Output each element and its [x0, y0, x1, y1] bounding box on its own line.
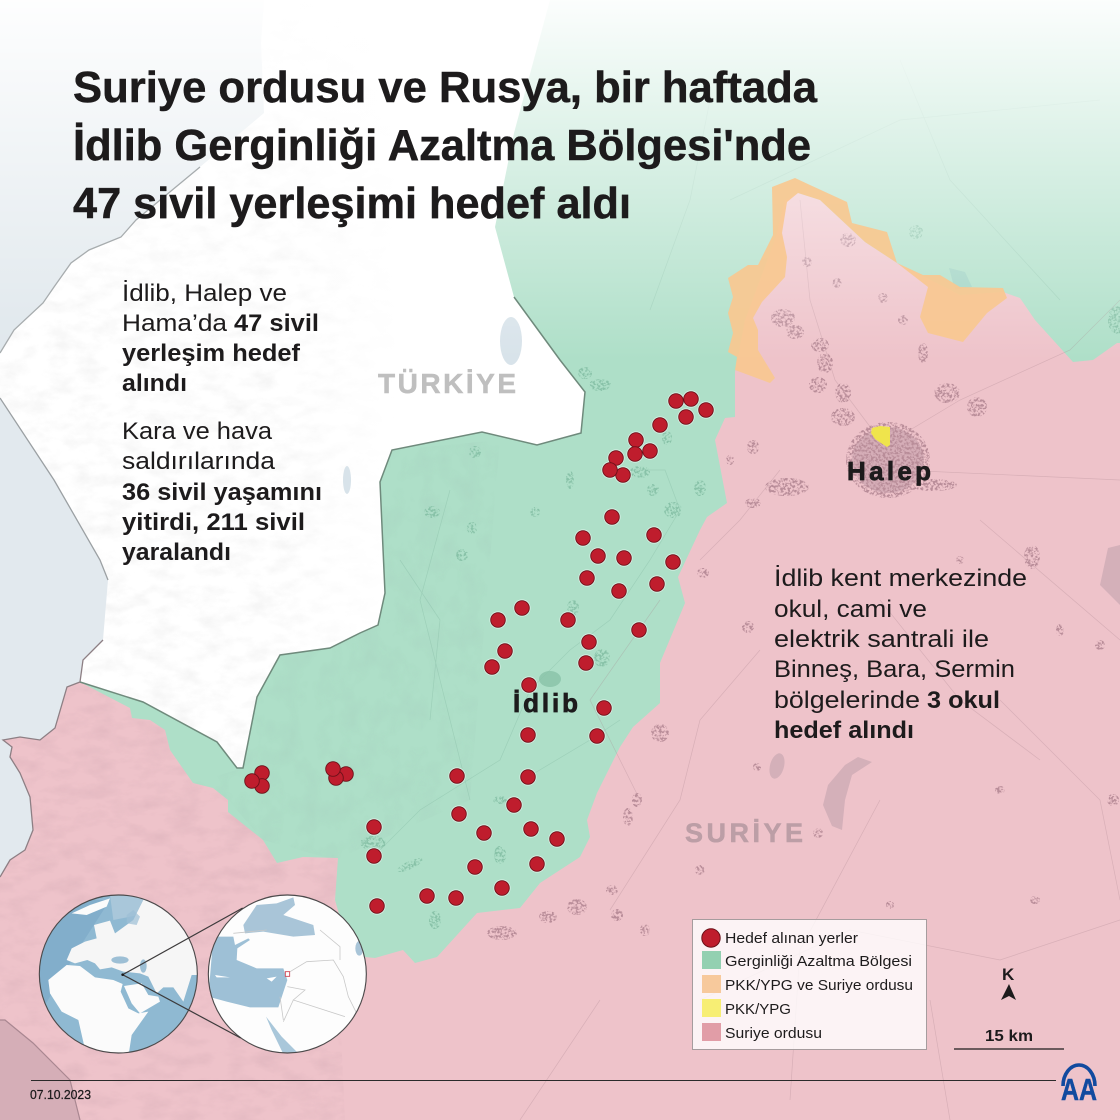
text block: 36 sivil yaşamını yitirdi: Kara ve hava — [122, 418, 273, 445]
region: PKK/YPG ve Suriye ordusu — [728, 178, 1007, 383]
legend item: Hedef alınan yerler: Hedef alınan yerler — [725, 930, 858, 947]
logo: AA: AA — [1061, 1072, 1097, 1107]
legend item: PKK/YPG ve Suriye ordusu: PKK/YPG ve Suriye ordusu — [725, 977, 913, 994]
connector lines — [123, 908, 243, 1038]
scale bar — [954, 1028, 1064, 1049]
map label: Halep: Halep — [847, 456, 931, 486]
north arrow: K — [1002, 965, 1015, 984]
text block: İdlib kent merkezi: hedef alındı — [774, 717, 914, 744]
title — [73, 63, 818, 228]
text block: 47 sivil yerleşim: yerleşim hedef — [122, 340, 301, 367]
footer rule — [31, 1080, 1056, 1082]
map label: Türkiye: TÜRKİYE — [378, 368, 516, 399]
overlay fade at top — [0, 0, 1120, 360]
world globe — [39, 895, 203, 1057]
text block: İdlib kent merkezi — [774, 565, 1027, 744]
text block: 36 sivil yaşamını yitirdi: yaralandı — [122, 539, 231, 566]
text block: 47 sivil yerleşim: Hama’da — [122, 310, 228, 337]
region: PKK/YPG — [871, 426, 890, 447]
text block: İdlib kent merkezi: bölgelerinde — [774, 687, 920, 714]
scale bar: 15 km — [985, 1028, 1033, 1045]
date: 07.10.2023 — [30, 1087, 91, 1102]
text block: İdlib kent merkezi: 3 okul — [927, 687, 1000, 714]
north arrow — [1001, 965, 1016, 1000]
settlements — [852, 427, 924, 493]
text block: 47 sivil yerleşim: alındı — [122, 370, 187, 397]
text block: 47 sivil yerleşim: İdlib, Halep ve — [122, 280, 287, 307]
map label: Suriye: SURİYE — [685, 818, 803, 848]
green-zone settlements — [360, 225, 1120, 929]
inset: globes — [39, 895, 366, 1057]
text block: İdlib kent merkezi: Binneş, Bara, Sermin — [774, 656, 1015, 683]
legend item: Suriye ordusu: Suriye ordusu — [725, 1025, 822, 1042]
roads — [520, 200, 1120, 1120]
text block: İdlib kent merkezi: okul, cami ve — [774, 596, 927, 623]
zoomed globe — [208, 895, 366, 1054]
title: 47 sivil yerleşimi hedef aldı — [73, 179, 631, 228]
text block: İdlib kent merkezi: İdlib kent merkezinde — [774, 565, 1027, 592]
title: Suriye ordusu ve Rusya, bir haftada — [73, 63, 818, 112]
coast and border lines — [0, 167, 585, 877]
legend — [692, 920, 926, 1050]
logo: AA — [1061, 1065, 1097, 1107]
text block: İdlib kent merkezi: elektrik santrali ile — [774, 626, 989, 653]
lakes — [343, 317, 522, 494]
legend item: PKK/YPG — [702, 999, 791, 1018]
text block: 47 sivil yerleşim — [122, 280, 319, 397]
title: İdlib Gerginliği Azaltma Bölgesi'nde — [73, 121, 811, 170]
text block: 47 sivil yerleşim: 47 sivil — [234, 310, 319, 337]
markers: targeted locations — [245, 390, 715, 915]
text block: 36 sivil yaşamını yitirdi: yitirdi, 211 sivil — [122, 509, 305, 536]
legend item: PKK/YPG: PKK/YPG — [725, 1001, 791, 1018]
text block: 36 sivil yaşamını yitirdi: 36 sivil yaşamını — [122, 479, 322, 506]
legend item: Suriye ordusu — [702, 1023, 822, 1042]
text block: 36 sivil yaşamını yitirdi — [122, 418, 322, 566]
text block: 36 sivil yaşamını yitirdi: saldırılarında — [122, 448, 276, 475]
map label: İdlib: İdlib — [513, 688, 578, 718]
legend item: Gerginliği Azaltma Bölgesi: Gerginliği Azaltma Bölgesi — [725, 953, 912, 970]
